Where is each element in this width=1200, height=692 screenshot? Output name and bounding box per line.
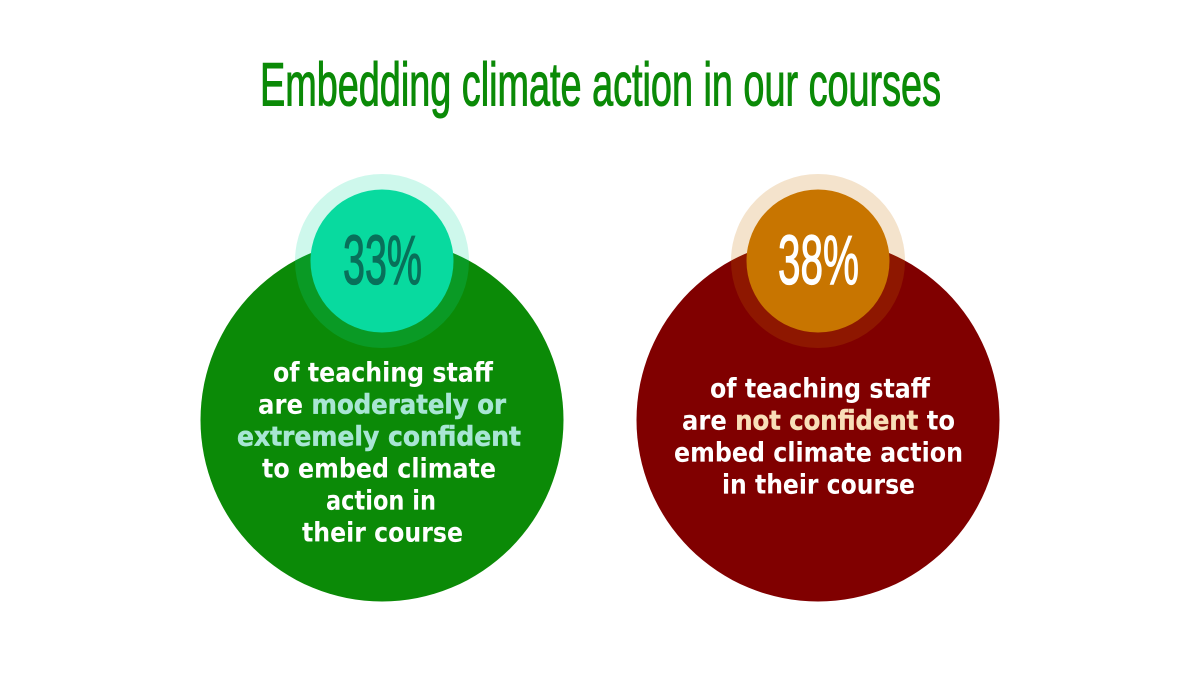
text block: not confident description xyxy=(674,374,963,500)
text block: not confident description: in their course xyxy=(722,470,915,500)
large green circle xyxy=(200,238,564,602)
text block: confident description: extremely confident xyxy=(237,422,521,452)
text block: not confident description: are not confident to xyxy=(682,406,955,436)
text block: confident description: are moderately or xyxy=(258,390,506,420)
text block: confident description: to embed climate xyxy=(262,454,496,484)
percentage badge: 33%: 33% xyxy=(343,221,422,299)
text block: confident description: action in xyxy=(326,486,436,516)
text block: not confident description: of teaching staff xyxy=(710,374,930,404)
large dark red circle xyxy=(636,238,1000,602)
percentage badge: 38%: 38% xyxy=(778,221,859,299)
text block: not confident description: embed climate action xyxy=(674,438,963,468)
text block: confident description: of teaching staff xyxy=(273,358,493,388)
percentage badge: 33% xyxy=(295,174,469,348)
percentage badge: 38% xyxy=(731,174,905,348)
text block: confident description: their course xyxy=(302,518,463,548)
text block: confident description xyxy=(237,358,521,548)
panel: not confident staff xyxy=(636,174,1000,602)
panel: confident staff xyxy=(200,174,564,602)
